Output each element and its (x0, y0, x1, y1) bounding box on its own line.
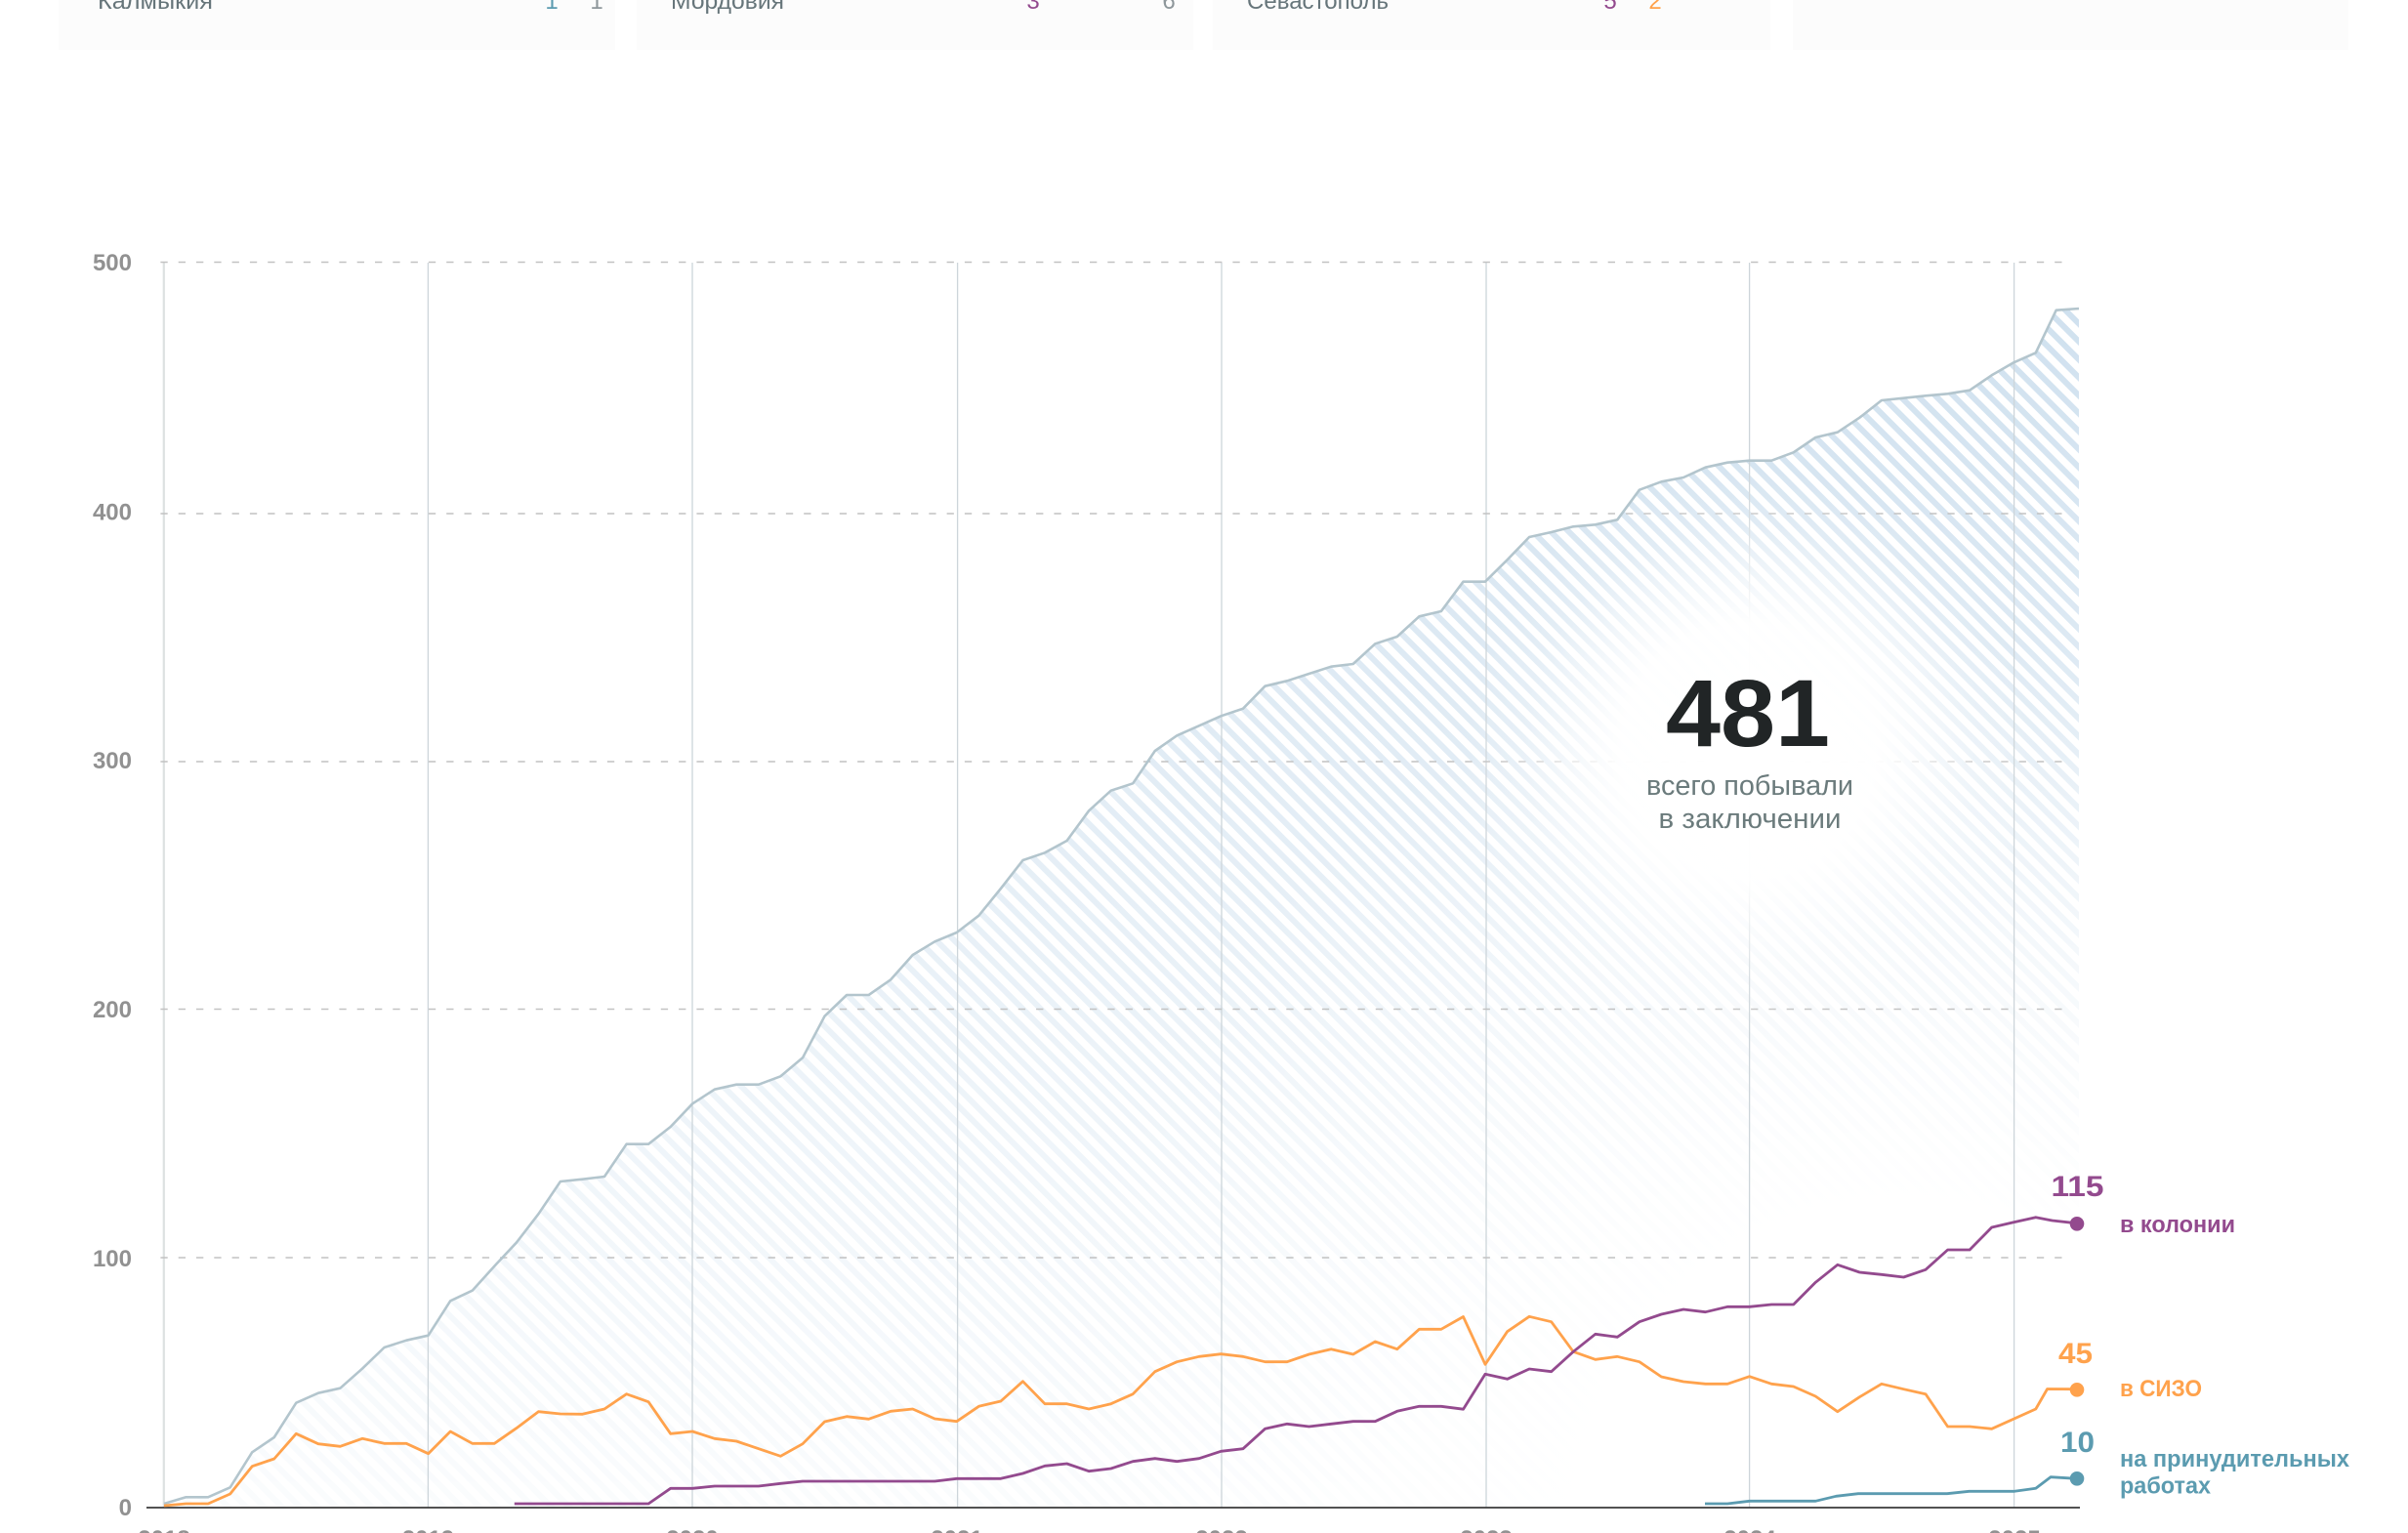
series label: в СИЗО 45 (2058, 1338, 2202, 1402)
y axis labels: 300 (93, 748, 132, 774)
panel: table row remnants (59, 0, 2348, 50)
line: in pre-trial detention (СИЗО) (164, 1316, 2077, 1506)
line: total ever imprisoned (164, 309, 2079, 1504)
line: in penal colony (515, 1218, 2077, 1504)
line: forced labour (1705, 1477, 2077, 1504)
y axis labels (93, 250, 132, 1521)
callout: total 481: всего побывали (1646, 770, 1853, 802)
callout: total 481 (1646, 660, 1853, 835)
series label: в СИЗО 45: в СИЗО (2120, 1376, 2202, 1402)
series label: на принудительных работах 10: на принудительных (2120, 1446, 2350, 1472)
table row: Севастополь (1247, 0, 1662, 15)
grid: vertical year lines (164, 263, 2014, 1508)
grid: horizontal dashed lines (160, 262, 2067, 1258)
callout: total 481: 481 (1666, 660, 1830, 766)
y axis labels: 100 (93, 1246, 132, 1272)
series label: в СИЗО 45: 45 (2058, 1338, 2093, 1370)
y axis labels: 200 (93, 997, 132, 1023)
table row: Калмыкия (98, 0, 603, 15)
table row: Мордовия (671, 0, 1176, 15)
series label: на принудительных работах 10 (2060, 1427, 2350, 1500)
series label: в колонии 115 (2051, 1171, 2235, 1238)
series label: на принудительных работах 10: работах (2120, 1472, 2212, 1500)
white halo behind total label (1466, 469, 2032, 1035)
y axis labels: 400 (93, 500, 132, 525)
y axis labels: 500 (93, 250, 132, 276)
series label: на принудительных работах 10: 10 (2060, 1427, 2095, 1459)
area: hatched total fill (156, 303, 2085, 1510)
x axis line (146, 1507, 2080, 1509)
series label: в колонии 115: в колонии (2120, 1212, 2235, 1238)
x axis year labels (138, 1526, 2041, 1533)
y axis labels: 0 (119, 1495, 132, 1521)
callout: total 481: в заключении (1658, 804, 1842, 835)
series label: в колонии 115: 115 (2051, 1171, 2103, 1203)
